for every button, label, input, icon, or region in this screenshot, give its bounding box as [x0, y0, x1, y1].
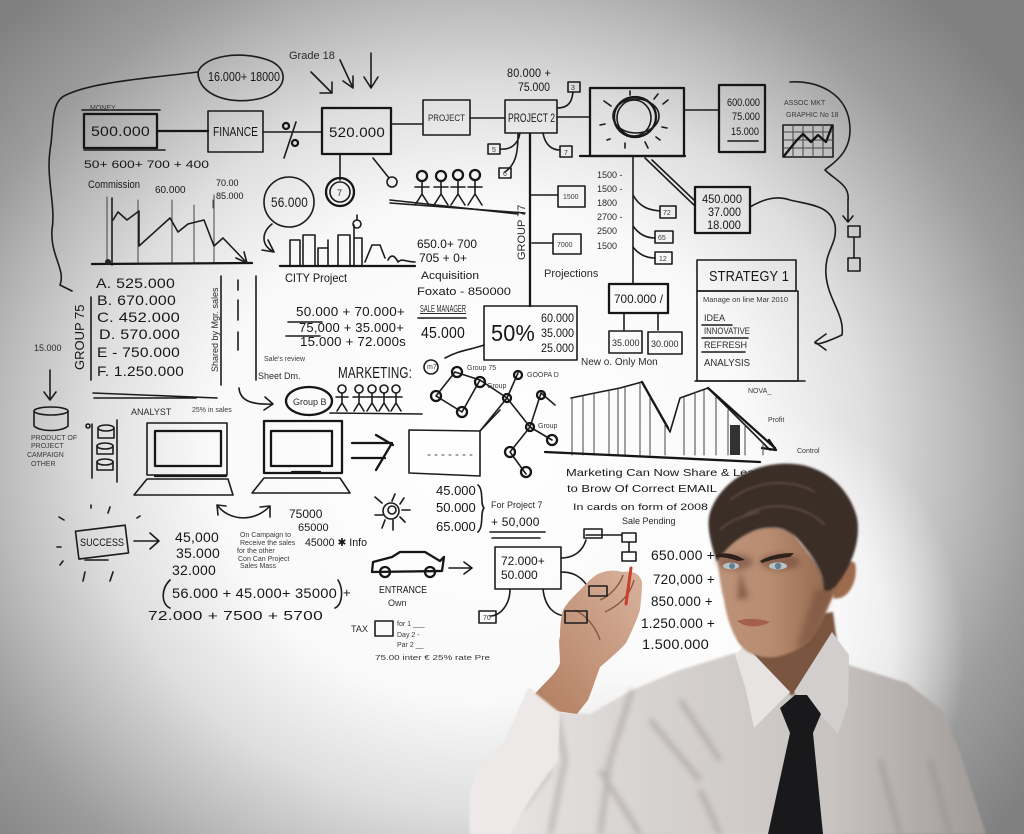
commission line chart: 70.00 — [216, 178, 239, 188]
city skyline: CITY Project — [285, 271, 348, 285]
commission line chart: 85.000 — [216, 191, 244, 201]
45.000 sums: For Project 7 — [491, 500, 543, 510]
small note: Con Can Project — [238, 556, 289, 563]
marker pen — [626, 568, 631, 604]
project 2 box — [505, 66, 557, 133]
forearm and hand — [532, 571, 642, 714]
equations: 15.000 + 72.000s — [300, 334, 406, 349]
commission line chart: 60.000 — [155, 185, 186, 196]
node network — [424, 360, 559, 477]
values 75000 — [289, 507, 367, 549]
sum list right — [641, 547, 715, 652]
label and arrows: grade 18 — [289, 50, 378, 93]
column of numbers: 1800 — [597, 198, 617, 208]
box: 72.000: 70 — [483, 615, 491, 622]
15.000 database — [27, 343, 77, 468]
businessman — [470, 464, 986, 834]
45.000 sums: + 50,000 — [491, 515, 540, 529]
project box — [391, 100, 505, 135]
list A to F: D. 570.000 — [99, 326, 180, 342]
list A to F: Shared by Mgr. sales — [210, 287, 220, 372]
project box: PROJECT — [428, 113, 465, 123]
sums block: 56.000 + 45.000+ 35000 — [172, 586, 337, 601]
values 75000: 65000 — [298, 522, 329, 534]
tax note: Day 2 - — [397, 632, 420, 639]
circle 7 — [326, 154, 397, 206]
note column: SALE MANAGER — [420, 304, 466, 315]
box: 600.000: 75.000 — [732, 111, 760, 123]
building-like area chart: Control — [797, 448, 820, 455]
branch tree: New o. Only Mon — [581, 357, 658, 368]
sums block — [148, 529, 351, 623]
sums block: 72.000 + 7500 + 5700 — [148, 608, 323, 623]
branch tree: 65 — [658, 235, 666, 242]
node network: Group 75 — [467, 365, 496, 372]
city skyline — [280, 215, 415, 285]
hair highlights — [720, 483, 825, 530]
values 75000: 75000 — [289, 507, 323, 521]
note column: 45.000 — [421, 325, 465, 342]
column of numbers: 2500 — [597, 226, 617, 236]
box: 72.000 — [479, 529, 636, 623]
list A to F: ANALYST — [131, 407, 172, 417]
sum list right: 1.250.000 + — [641, 616, 715, 631]
box: 500.000 — [82, 105, 165, 150]
shirt folds — [500, 690, 950, 834]
laptop right — [252, 421, 350, 493]
box: 72.000: 72.000+ — [501, 554, 545, 568]
sum text: 50+ 600+ 700 + 400 — [84, 159, 209, 171]
box: 520.000 — [322, 108, 391, 154]
people and circle 7 — [262, 154, 525, 285]
equations: 75,000 + 35.000+ — [299, 320, 404, 335]
values 75000: 45000 ✱ Info — [305, 537, 367, 549]
box: 600.000: 600.000 — [727, 97, 760, 109]
box: 50%: 35.000 — [541, 326, 574, 340]
strategy panel: REFRESH — [704, 340, 747, 350]
box: 520.000: 520.000 — [329, 124, 385, 140]
branch tree: 35.000 — [612, 338, 640, 348]
central trunk group 77: 7000 — [557, 242, 573, 249]
sums block: 45,000 — [175, 529, 219, 545]
note column: Acquisition — [421, 270, 479, 282]
line chart thumbnail: ASSOC MKT — [784, 100, 826, 107]
central trunk group 77: 1500 — [563, 194, 579, 201]
box: 50%: 50% — [491, 320, 535, 346]
box: 450.000 — [645, 158, 842, 350]
line chart thumbnail — [783, 100, 839, 157]
small note — [237, 532, 296, 570]
sums block: + — [343, 585, 351, 600]
equations: 50.000 + 70.000+ — [296, 304, 405, 319]
box: 450.000: 450.000 — [702, 194, 742, 206]
eyebrows — [716, 553, 794, 563]
list A to F: GROUP 75 — [72, 304, 87, 370]
bubble: 16.000 + 18000: 16.000+ 18000 — [208, 69, 280, 84]
small numbered boxes: 3 — [571, 85, 575, 92]
bubble: 16.000 + 18000 — [49, 55, 283, 291]
car sketch: Own — [388, 598, 407, 608]
list A to F: C. 452.000 — [97, 309, 180, 325]
45.000 sums: 50.000 — [436, 500, 476, 515]
neck — [738, 612, 838, 696]
box: 500.000: 500.000 — [91, 123, 150, 139]
label and arrows: grade 18: Grade 18 — [289, 50, 335, 62]
long note: In cards on form of 2008 — [573, 502, 708, 513]
central trunk group 77 — [390, 134, 599, 306]
tie — [768, 695, 823, 834]
small numbered boxes — [488, 82, 590, 178]
long note: Sale Pending — [622, 516, 676, 526]
sums block: 35.000 — [176, 545, 220, 561]
stick figures — [390, 170, 525, 213]
small note: Receive the sales — [240, 540, 296, 547]
column of numbers: 1500 — [597, 241, 617, 251]
branch tree: 700.000 / — [614, 292, 664, 306]
small numbered boxes: 6 — [503, 171, 507, 178]
project 2 box: 80.000 + — [507, 66, 551, 80]
box: finance — [208, 111, 263, 152]
branch tree: 30.000 — [651, 339, 679, 349]
small numbered boxes: 5 — [492, 147, 496, 154]
sum list right: 850.000 + — [651, 593, 713, 609]
right side wiggle — [790, 82, 850, 200]
column of numbers: 1500 - — [597, 170, 623, 180]
sun box — [580, 88, 685, 156]
circle 7: 7 — [337, 188, 342, 198]
box: finance: FINANCE — [213, 124, 258, 139]
strategy panel — [695, 260, 805, 395]
connector — [157, 130, 208, 132]
15.000 database: OTHER — [31, 461, 56, 468]
tax note: Par 2 __ — [397, 642, 424, 649]
15.000 database: 15.000 — [34, 343, 62, 353]
marketing group: Sheet Dm. — [258, 371, 301, 381]
face shading — [717, 554, 832, 650]
tax note: for 1 ___ — [397, 621, 425, 628]
note column: 650.0+ 700 — [417, 237, 477, 251]
hair — [709, 464, 858, 591]
small note: On Campaign to — [240, 532, 291, 539]
laptop left — [134, 423, 233, 495]
long note: Marketing Can Now Share & Learn — [566, 467, 766, 479]
car sketch — [372, 552, 472, 608]
strategy panel: IDEA — [704, 313, 725, 323]
strategy panel: NOVA_ — [748, 388, 771, 395]
box: 50% — [445, 306, 577, 360]
strategy panel: Manage on line Mar 2010 — [703, 297, 788, 304]
equations — [286, 304, 406, 349]
list A to F — [72, 275, 256, 417]
box: 50%: 25.000 — [541, 341, 574, 355]
note column: 705 + 0+ — [419, 251, 467, 265]
box: 72.000: 50.000 — [501, 568, 538, 582]
central trunk group 77: Projections — [544, 268, 599, 280]
box: 600.000: 15.000 — [731, 126, 759, 138]
marketing group: Sale's review — [264, 356, 306, 363]
small flow on right — [843, 200, 860, 271]
15.000 database: PRODUCT OF — [31, 435, 77, 442]
bubble: 56.000 — [262, 177, 314, 252]
central trunk group 77: GROUP 77 — [516, 205, 528, 260]
finger lines — [575, 575, 634, 640]
box: 500.000: MONEY — [90, 105, 116, 112]
note column: Foxato - 850000 — [417, 286, 511, 298]
strategy panel: INNOVATIVE — [704, 326, 750, 336]
marketing group — [239, 356, 422, 415]
cuff — [470, 688, 560, 834]
branch tree: 12 — [659, 256, 667, 263]
list A to F: A. 525.000 — [96, 275, 175, 291]
small note: Sales Mass — [240, 563, 277, 570]
sum list right: 1.500.000 — [642, 637, 709, 652]
box: 450.000: 18.000 — [707, 220, 741, 232]
tax note — [351, 621, 490, 662]
box: 450.000: 37.000 — [708, 207, 741, 219]
box: 50%: 60.000 — [541, 311, 574, 325]
node network: Group — [487, 383, 507, 390]
small boxes on hand — [565, 586, 607, 623]
top flow chart — [49, 50, 850, 291]
sum list right: 650.000 + — [651, 547, 715, 563]
sum list right: 720,000 + — [653, 571, 715, 587]
long note — [566, 467, 766, 526]
long note: to Brow Of Correct EMAIL — [567, 483, 717, 495]
small note: for the other — [237, 548, 275, 555]
car sketch: ENTRANCE — [379, 585, 427, 596]
success burst: SUCCESS — [80, 537, 124, 549]
success burst — [57, 505, 159, 581]
bubble: 56.000: 56.000 — [271, 194, 308, 210]
note column — [417, 237, 511, 342]
branch tree — [581, 156, 682, 368]
commission line chart — [88, 178, 252, 265]
strategy panel: ANALYSIS — [704, 358, 750, 369]
face — [716, 526, 836, 657]
list A to F: F. 1.250.000 — [97, 363, 184, 379]
sums block: 32.000 — [172, 562, 216, 578]
collar — [735, 632, 849, 734]
column of numbers: 1500 - — [597, 184, 623, 194]
45.000 sums: 65.000 — [436, 519, 476, 534]
percent symbol — [263, 122, 322, 158]
mouth — [737, 619, 770, 626]
double arrow — [352, 435, 393, 470]
sketch diagram — [27, 50, 860, 662]
column of numbers — [597, 170, 623, 251]
double headed arrow — [217, 505, 270, 518]
45.000 sums: 45.000 — [436, 483, 476, 498]
line chart thumbnail: GRAPHIC No 18 — [786, 112, 839, 119]
blank slide — [409, 410, 500, 476]
list A to F: E - 750.000 — [97, 344, 180, 360]
tax note: 75.00 inter € 25% rate Pre — [375, 655, 490, 662]
project 2 box: 75.000 — [518, 80, 550, 94]
15.000 database: PROJECT — [31, 443, 64, 450]
light glow behind man — [590, 400, 970, 834]
body shirt — [470, 645, 986, 834]
branch tree: 72 — [663, 210, 671, 217]
project 2 box: PROJECT 2 — [508, 113, 555, 125]
tax note: TAX — [351, 624, 368, 634]
ear — [833, 561, 856, 598]
small numbered boxes: 7 — [564, 150, 568, 157]
list A to F: 25% in sales — [192, 407, 232, 414]
building-like area chart — [545, 382, 820, 462]
box: 600.000 — [684, 85, 765, 152]
commission line chart: Commission — [88, 179, 140, 191]
strategy panel: STRATEGY 1 — [709, 268, 789, 285]
node network: Group — [538, 423, 558, 430]
marketing group: Group B — [293, 397, 327, 407]
45.000 sums — [436, 483, 545, 538]
eyes — [723, 562, 787, 570]
node network: GOOPA D — [527, 372, 559, 379]
column of numbers: 2700 - — [597, 212, 623, 222]
marketing group: MARKETING: — [338, 365, 412, 382]
15.000 database: CAMPAIGN — [27, 452, 64, 459]
list A to F: B. 670.000 — [97, 292, 176, 308]
building-like area chart: Profit — [768, 417, 784, 424]
sun icon — [375, 494, 410, 530]
node network: m7 — [427, 364, 437, 371]
stacked servers — [86, 420, 117, 482]
